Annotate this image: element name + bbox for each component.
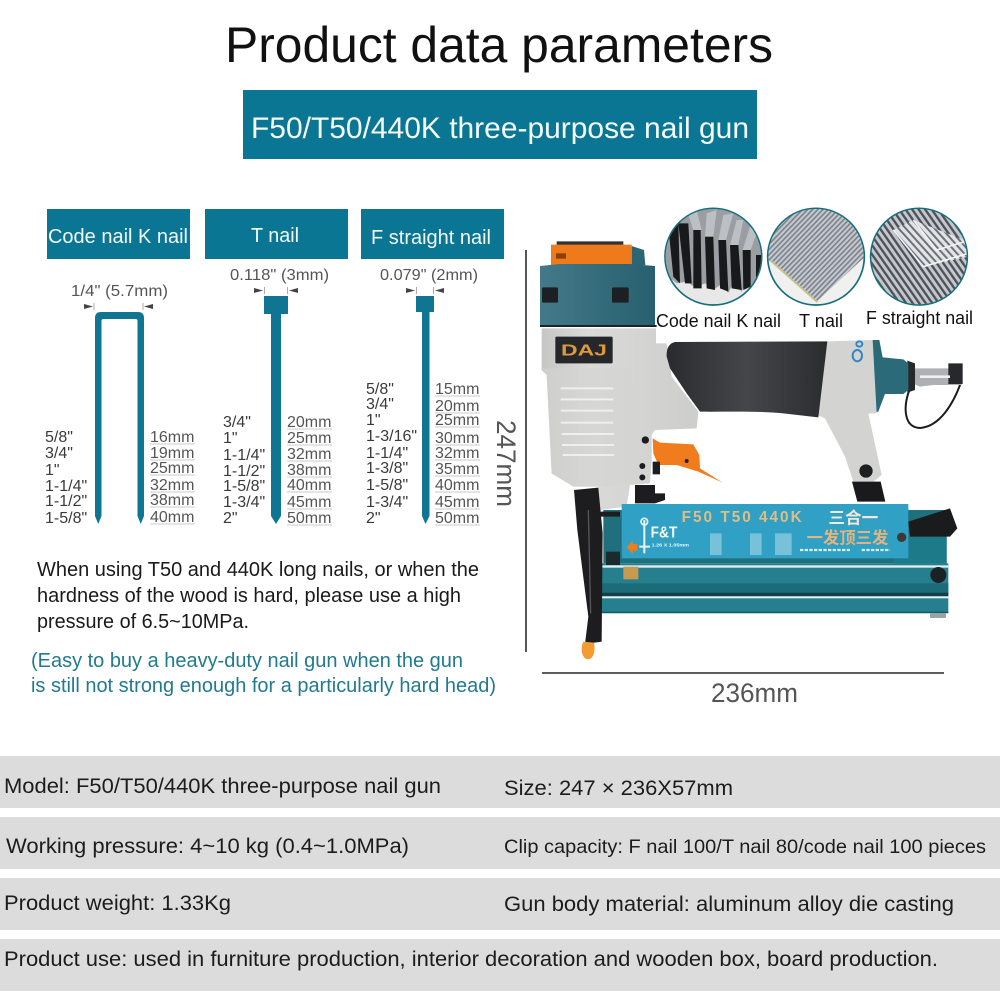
spec row: working pressure and clip capacity: Working pressure: 4~10 kg (0.4~1.0MPa) <box>6 835 409 858</box>
diagram: F straight nail with sizes: 5/8" <box>366 381 394 398</box>
badge: DAJ logo: DAJ <box>561 343 607 360</box>
magazine label text <box>627 507 890 555</box>
diagram: T nail with sizes: 45mm <box>287 494 331 511</box>
note: heavy-duty suggestion <box>31 650 496 697</box>
diagram: code nail K nail staple with sizes: 5/8" <box>45 429 73 446</box>
body: rear grey housing and strut <box>813 340 882 482</box>
diagram: code nail K nail staple with sizes: 1/4" (5.7mm) <box>71 283 168 300</box>
banner: model heading: F50/T50/440K three-purpose nail gun <box>251 112 749 145</box>
diagram: F straight nail with sizes: 1-1/4" <box>366 445 408 462</box>
trigger <box>635 436 723 503</box>
diagram: code nail K nail staple with sizes: 1-1/2" <box>45 493 87 510</box>
nose <box>574 488 620 659</box>
diagram: F straight nail with sizes: 32mm <box>435 445 479 462</box>
diagram: code nail K nail staple with sizes: 3/4" <box>45 445 73 462</box>
heading: F straight nail: F straight nail <box>371 227 491 249</box>
nail photo: T nail <box>767 207 865 305</box>
diagram: F straight nail with sizes: 40mm <box>435 477 479 494</box>
magazine label text: 一发顶三发 <box>807 528 888 547</box>
body: main grey housing <box>542 328 698 510</box>
spec row: working pressure and clip capacity <box>0 817 1000 869</box>
diagram: code nail K nail staple with sizes: 1-1/4" <box>45 478 87 495</box>
diagram: F straight nail with sizes: 15mm <box>435 381 479 398</box>
note: high pressure advice: pressure of 6.5~10MPa. <box>37 611 249 633</box>
spec row: product use: Product use: used in furniture production, interior decoration and wooden box, board production. <box>4 948 938 971</box>
dimension: width 236mm: 236mm <box>711 678 798 708</box>
diagram: code nail K nail staple with sizes: 40mm <box>150 509 194 526</box>
heading: F straight nail <box>361 209 504 259</box>
diagram: code nail K nail staple with sizes: 1-5/8" <box>45 510 87 527</box>
diagram: F straight nail with sizes: 20mm <box>435 398 479 415</box>
magazine label text: 三合一 <box>828 507 879 527</box>
diagram: T nail with sizes: 20mm <box>287 414 331 431</box>
spec row: model and size: Model: F50/T50/440K three-purpose nail gun <box>4 775 441 798</box>
nail photo: F straight nail <box>870 208 968 305</box>
diagram: T nail with sizes: 1-5/8" <box>223 478 265 495</box>
diagram: T nail with sizes: 38mm <box>287 462 331 479</box>
icon: body ribs <box>561 388 614 455</box>
diagram: F straight nail with sizes: 25mm <box>435 412 479 429</box>
diagram: T nail with sizes <box>223 267 332 527</box>
icon: air hose and connector <box>906 361 963 428</box>
diagram: F straight nail with sizes: 1-3/4" <box>366 494 408 511</box>
body: shading between housing and magazine <box>542 368 652 487</box>
heading: code nail K nail: Code nail K nail <box>48 226 188 248</box>
spec row: product use <box>0 939 1000 991</box>
note: heavy-duty suggestion: (Easy to buy a heavy-duty nail gun when the gun <box>31 650 463 672</box>
heading: code nail K nail <box>47 209 190 259</box>
diagram: F straight nail with sizes: 2" <box>366 510 381 527</box>
icon: air logo <box>853 341 862 361</box>
label: T nail photo: T nail <box>799 311 843 331</box>
diagram: code nail K nail staple with sizes: 19mm <box>150 445 194 462</box>
diagram: F straight nail with sizes: 35mm <box>435 461 479 478</box>
diagram: T nail with sizes: 0.118" (3mm) <box>230 267 329 284</box>
diagram: T nail with sizes: 40mm <box>287 477 331 494</box>
diagram: code nail K nail staple with sizes: 25mm <box>150 460 194 477</box>
diagram: F straight nail with sizes: 1-3/8" <box>366 460 408 477</box>
diagram: F straight nail with sizes: 0.079" (2mm) <box>380 267 478 284</box>
diagram: F straight nail with sizes: 1-3/16" <box>366 428 417 445</box>
magazine <box>602 504 957 618</box>
icon: rear teal fitting <box>868 340 908 413</box>
heading: T nail <box>205 209 348 259</box>
nail photo: code nail <box>665 208 762 305</box>
diagram: code nail K nail staple with sizes: 16mm <box>150 429 194 446</box>
spec row: model and size: Size: 247 × 236X57mm <box>504 777 733 800</box>
diagram: code nail K nail staple with sizes: 32mm <box>150 477 194 494</box>
diagram: F straight nail with sizes <box>366 267 480 527</box>
diagram: code nail K nail staple with sizes: 38mm <box>150 492 194 509</box>
label: F straight nail photo: F straight nail <box>866 308 973 328</box>
spec row: weight and body material <box>0 878 1000 930</box>
spec row: weight and body material: Product weight: 1.33Kg <box>4 892 231 915</box>
note: heavy-duty suggestion: is still not strong enough for a particularly hard head) <box>31 675 496 697</box>
diagram: T nail with sizes: 25mm <box>287 430 331 447</box>
grip <box>667 341 827 417</box>
diagram: F straight nail with sizes: 50mm <box>435 510 479 527</box>
spec row: weight and body material: Gun body material: aluminum alloy die casting <box>504 893 954 916</box>
note: high pressure advice: When using T50 and 440K long nails, or when the <box>37 559 479 581</box>
note: high pressure advice <box>37 559 479 633</box>
diagram: F straight nail with sizes: 30mm <box>435 430 479 447</box>
diagram: code nail K nail staple with sizes <box>45 283 195 527</box>
title: Product data parameters <box>225 17 773 73</box>
diagram: code nail K nail staple with sizes: 1" <box>45 462 60 479</box>
note: high pressure advice: hardness of the wood is hard, please use a high <box>37 585 461 607</box>
diagram: F straight nail with sizes: 45mm <box>435 494 479 511</box>
banner: model heading <box>243 90 757 159</box>
label: code nail K nail photo: Code nail K nail <box>656 311 781 331</box>
diagram: T nail with sizes: 1-3/4" <box>223 494 265 511</box>
magazine label text: F&T <box>651 524 678 541</box>
spec row: model and size <box>0 756 1000 808</box>
nail gun illustration <box>540 207 968 659</box>
diagram: F straight nail with sizes: 1" <box>366 412 381 429</box>
diagram: T nail with sizes: 50mm <box>287 510 331 527</box>
badge: DAJ logo <box>555 337 613 363</box>
heading: T nail: T nail <box>251 225 299 247</box>
diagram: T nail with sizes: 1-1/2" <box>223 463 265 480</box>
diagram: T nail with sizes: 32mm <box>287 446 331 463</box>
diagram: T nail with sizes: 3/4" <box>223 414 251 431</box>
diagram: F straight nail with sizes: 3/4" <box>366 396 394 413</box>
magazine label text: 1.26 X 1.05mm <box>652 543 690 549</box>
dimension: height 247mm: 247mm <box>491 420 521 507</box>
magazine label text: F50 T50 440K <box>682 509 802 526</box>
strut clamp <box>852 464 885 502</box>
diagram: F straight nail with sizes: 1-5/8" <box>366 477 408 494</box>
diagram: T nail with sizes: 2" <box>223 510 238 527</box>
diagram: T nail with sizes: 1" <box>223 430 238 447</box>
spec row: working pressure and clip capacity: Clip capacity: F nail 100/T nail 80/code nail 100 pieces <box>504 836 986 858</box>
diagram: T nail with sizes: 1-1/4" <box>223 447 265 464</box>
head cap <box>540 241 657 327</box>
